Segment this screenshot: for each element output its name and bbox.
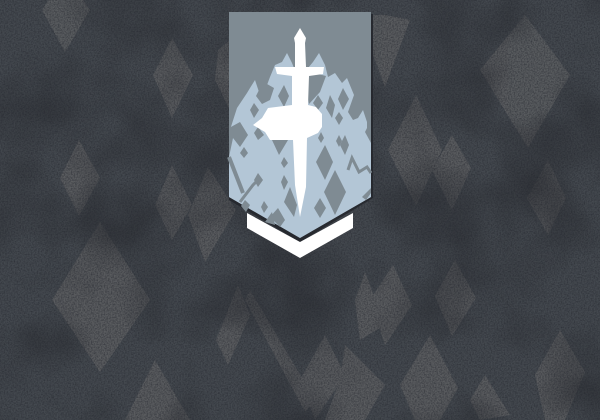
sword and gauntlet xyxy=(253,28,324,217)
banner field xyxy=(229,12,371,238)
flame silhouette xyxy=(229,53,371,238)
shield banner xyxy=(229,12,373,258)
white chevron xyxy=(247,213,353,258)
flames xyxy=(229,53,371,238)
flame gaps and diamonds xyxy=(229,72,371,227)
banner shadow xyxy=(229,14,373,242)
